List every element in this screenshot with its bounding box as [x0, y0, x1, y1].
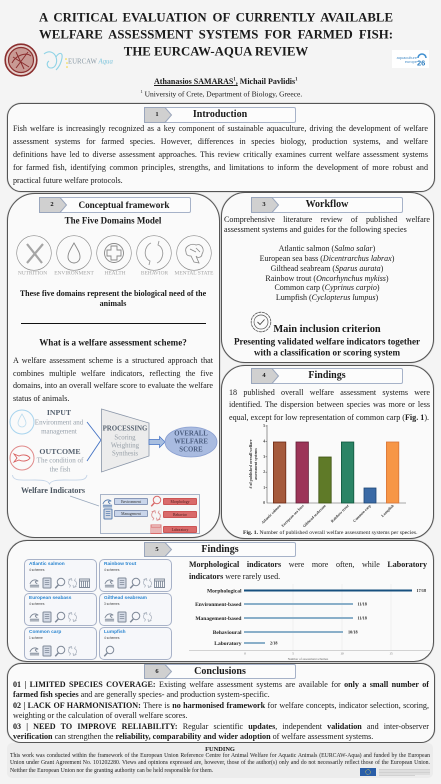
input label: Environment and — [35, 418, 83, 426]
species list: Common carp (Cyprinus carpio) — [274, 283, 380, 292]
introduction text: Fish welfare is increasingly recognized as a key component of sustainable aquaculture, driving the development of welfare — [13, 124, 428, 133]
logo: EURCAW-Aqua: EURCAW Aqua — [68, 59, 113, 66]
y tick labels: 4 — [263, 440, 265, 444]
statement: five domains: animals — [100, 299, 126, 308]
heading: introduction — [144, 107, 296, 123]
connector to indicators box — [70, 496, 99, 506]
diagram: welfare scoring flow — [10, 408, 218, 534]
management pill: Management — [121, 512, 141, 516]
panel: findings indicators — [7, 540, 434, 662]
icon: clipboard — [104, 508, 112, 520]
card: Common carp — [24, 627, 97, 660]
conclusion 02 — [13, 701, 429, 720]
logo: Aquaculture Europe 26 — [392, 50, 429, 68]
funding heading: FUNDING — [205, 746, 235, 753]
introduction text — [13, 124, 428, 185]
species list — [260, 244, 394, 302]
findings text: equal, except for low representation of common carp (Fig. 1). — [229, 413, 429, 422]
axis ticks: Number of assessment schemes — [288, 657, 329, 661]
funding text: Neither the European Union nor the granting authority can be held responsible for them. — [10, 768, 213, 774]
environment pill: Environment — [121, 500, 141, 504]
conclusion 03: 03 | NEED TO IMPROVE RELIABILITY: Regular scientific updates, independent validation and inter-observer — [13, 722, 429, 731]
introduction text: definitions have led to diverse assessment approaches. This review critically examines current welfare assessment systems — [13, 150, 428, 159]
overall score label — [174, 430, 208, 454]
value labels: 2/18 — [270, 640, 277, 646]
y axis title — [249, 439, 258, 488]
value labels: 11/18 — [358, 616, 367, 620]
scheme definition text: combines multiple welfare indicators, reflecting the five — [13, 368, 213, 377]
overall score label: SCORE — [179, 447, 203, 454]
heading: findings — [251, 368, 403, 384]
logo: EURCAW-Aqua — [44, 51, 113, 70]
card: Gilthead seabream: 3 schemes — [104, 602, 119, 606]
heading: introduction: Introduction — [193, 109, 247, 120]
category labels — [261, 503, 395, 528]
workflow intro text — [224, 215, 430, 234]
findings text: 18 published overall welfare assessment systems were — [229, 388, 430, 397]
inclusion criterion heading: Main inclusion criterion — [273, 324, 381, 335]
scheme definition text: status of animals. — [13, 393, 69, 402]
axis ticks — [244, 652, 393, 661]
logo: University of Crete seal — [4, 43, 38, 77]
inclusion criterion text — [234, 336, 420, 358]
card: Lumpfish: Lumpfish — [104, 630, 126, 635]
panel: funding — [7, 743, 433, 778]
heading: conclusions — [144, 664, 296, 679]
heading: workflow: Workflow — [306, 199, 348, 210]
panel: conceptual framework — [7, 193, 220, 538]
input label: INPUT — [47, 408, 71, 417]
behavior pill: Behavior — [173, 513, 187, 517]
panel: conclusions — [7, 663, 435, 743]
value labels: 10/18 — [348, 630, 358, 634]
y tick labels: 3 — [263, 455, 265, 459]
conclusion 01: 01 | LIMITED SPECIES COVERAGE: Existing welfare assessment systems are available for only a small number of — [13, 680, 429, 689]
category labels: Behavioural — [213, 630, 242, 636]
value labels: 11/18 — [358, 602, 367, 606]
statement: five domains — [20, 289, 206, 308]
bar chart: indicator use — [189, 584, 430, 661]
subheading: what is a scheme: What is a welfare assessment scheme? — [39, 337, 187, 347]
outcome label: The condition of — [37, 456, 83, 464]
value labels — [270, 588, 426, 646]
logo: Aquaculture Europe 26: aquaculture europe — [397, 55, 417, 64]
y tick labels — [263, 424, 265, 505]
title: A CRITICAL EVALUATION OF CURRENTLY AVAILABLE — [39, 11, 393, 25]
heading: findings: Findings — [201, 544, 239, 555]
block arrow — [149, 436, 165, 448]
y axis — [266, 425, 406, 503]
morphology pill — [163, 498, 197, 505]
funding text: Union under Grant Agreement No. 101202280. Views and opinions expressed are, however, those of the author(s) only and do not necessarily reflect those of the European Union. — [10, 760, 430, 766]
inclusion criterion text: with a classification or scoring system — [254, 347, 400, 357]
card: European seabass: 4 schemes — [29, 602, 44, 606]
domain labels: ENVIRONMENT — [54, 270, 94, 276]
findings text: Morphological indicators were more often, while Laboratory — [189, 560, 427, 569]
laboratory pill: Laboratory — [172, 528, 188, 532]
authors: Athanasios SAMARAS1, Michail Pavlidis1 — [154, 77, 298, 86]
y axis title: # of published overall welfare — [249, 439, 253, 488]
domain labels: NUTRITION — [18, 270, 47, 276]
morphology pill: Morphology — [170, 500, 190, 504]
card: Lumpfish: 4 schemes — [104, 636, 119, 640]
domain labels: HEALTH — [104, 270, 126, 276]
heading: conclusions: 6 — [155, 668, 159, 675]
title — [39, 11, 393, 59]
heading: introduction: 1 — [155, 111, 159, 118]
category labels: Morphological — [207, 588, 242, 594]
findings text — [189, 560, 427, 581]
processing label: Synthesis — [112, 451, 138, 458]
conclusion 03: verification can strengthen the reliability, comparability and wider adoption of welfare assessment systems. — [13, 732, 373, 741]
bars — [273, 442, 399, 503]
outcome label: the fish — [50, 465, 70, 473]
funding text: This work was conducted within the framework of the European Union Reference Centre for Animal Welfare for Aquatic Animals (EURCAW-Aqua) and funded by the European — [10, 753, 430, 759]
conclusion 02: 02 | LACK OF HARMONISATION: There is no harmonised framework for welfare concepts, indicator selection, scoring, — [13, 701, 429, 710]
findings text: identified. The dispersion between species was more or less — [229, 400, 430, 409]
value labels: 17/18 — [416, 588, 426, 593]
panel: workflow — [221, 192, 434, 363]
disclaimer small print — [379, 769, 430, 776]
overall score label: WELFARE — [174, 439, 208, 446]
introduction text: assessment systems for farmed species. However, differences in species biology, production systems, and welfare — [13, 137, 428, 146]
panel: findings species — [221, 365, 434, 539]
category labels: Common carp — [352, 504, 372, 523]
species list: Lumpfish (Cyclopterus lumpus) — [276, 293, 378, 302]
funding text — [10, 752, 430, 774]
outcome label: OUTCOME — [39, 447, 81, 456]
card: Lumpfish — [99, 627, 172, 660]
y tick labels: 5 — [263, 424, 265, 428]
category labels: Environment-based — [195, 602, 242, 608]
processing label — [102, 426, 148, 458]
card: European seabass — [24, 593, 97, 626]
icon: magnifier — [150, 496, 162, 507]
heading: conceptual framework: Conceptual framework — [78, 200, 170, 210]
icon: health — [97, 236, 131, 270]
icon: validated badge — [250, 312, 272, 332]
species list: Atlantic salmon (Salmo salar) — [279, 244, 375, 253]
affiliation: 1 University of Crete, Department of Biology, Greece. — [140, 89, 302, 98]
laboratory pill — [163, 526, 197, 533]
card: Rainbow trout: Rainbow trout — [104, 562, 136, 567]
icon: swirl — [151, 510, 161, 521]
axis ticks: 0 — [244, 652, 246, 656]
grid — [293, 584, 391, 650]
outcome label — [36, 447, 84, 473]
EU co-funded flag — [360, 768, 376, 776]
input label: management — [41, 427, 77, 435]
workflow intro text: assessment systems and guides for the following species — [224, 225, 407, 234]
y axis title: assessment systems — [254, 448, 258, 480]
category labels — [195, 588, 242, 647]
scheme definition text: domains, into an overall welfare score to evaluate the welfare — [13, 381, 213, 390]
introduction text: for farmed fish, identifying common principles, strengths, and limitations to inform the development of more robust and — [13, 163, 428, 172]
heading: findings: 4 — [262, 372, 266, 379]
title: WELFARE ASSESSMENT SYSTEMS FOR FARMED FISH: — [39, 28, 393, 42]
axis ticks: 5 — [292, 652, 294, 656]
card: Gilthead seabream — [99, 593, 172, 626]
category labels: Gilthead seabream — [302, 503, 327, 528]
heading: conceptual framework — [39, 197, 191, 213]
indicators box — [100, 494, 200, 534]
y tick labels: 0 — [263, 501, 265, 505]
subheading: five domains model: The Five Domains Model — [65, 216, 161, 226]
scheme definition text — [13, 356, 213, 402]
species list: Gilthead seabream (Sparus aurata) — [271, 264, 383, 272]
welfare indicators label: Welfare Indicators — [21, 486, 85, 495]
icon: nutrition — [17, 236, 51, 270]
statement: five domains: These five domains represent the biological need of the — [20, 289, 206, 298]
scheme definition text: A welfare assessment scheme is a structured approach that — [13, 356, 213, 365]
behavior pill — [163, 511, 197, 518]
heading: workflow — [251, 197, 403, 213]
icon: behavior — [137, 236, 171, 270]
conclusion 03 — [13, 722, 429, 741]
environment pill — [114, 498, 148, 505]
species list: European sea bass (Dicentrarchus labrax) — [260, 254, 394, 263]
axis ticks: 15 — [389, 652, 393, 656]
conclusion 01: farmed fish species and are generally species- and production system-specific. — [13, 690, 270, 699]
workflow intro text: Comprehensive literature review of published welfare — [224, 215, 430, 224]
introduction text: practical future welfare protocols. — [13, 176, 123, 185]
y tick labels: 1 — [263, 486, 265, 490]
bar chart: schemes per species — [249, 424, 406, 528]
icon: laboratory — [150, 524, 162, 534]
logo: Aquaculture Europe 26: 26 — [417, 58, 425, 67]
figure caption: Fig. 1. Number of published overall welfare assessment systems per species. — [243, 530, 418, 536]
category labels: Rainbow trout — [330, 503, 350, 523]
processing label: PROCESSING — [103, 426, 147, 433]
management pill — [114, 510, 148, 517]
category labels: Atlantic salmon — [261, 503, 282, 525]
icon: water drop input — [10, 410, 34, 434]
category labels: Laboratory — [214, 641, 242, 647]
card: Rainbow trout — [99, 559, 172, 592]
icon: wave — [102, 499, 112, 508]
heading: conceptual framework: 2 — [50, 201, 54, 208]
icon: mental state — [177, 236, 211, 270]
findings text — [229, 388, 430, 422]
category labels: Management-based — [195, 616, 242, 622]
brace: welfare indicators — [12, 475, 87, 484]
overall score label: OVERALL — [174, 430, 208, 437]
heading: findings: Findings — [308, 370, 346, 381]
axis ticks: 10 — [340, 652, 344, 656]
y tick labels: 2 — [263, 470, 265, 474]
card: European seabass: European seabass — [29, 596, 71, 601]
panel: introduction — [7, 103, 435, 192]
inclusion criterion text: Presenting validated welfare indicators together — [234, 336, 420, 346]
domain labels — [18, 270, 214, 276]
card: Common carp: 1 scheme — [29, 636, 43, 640]
conclusion 01 — [13, 680, 430, 699]
overall score ellipse — [165, 427, 217, 457]
card: Atlantic salmon: Atlantic salmon — [29, 562, 65, 567]
heading: findings: 5 — [155, 546, 159, 553]
card: Rainbow trout: 4 schemes — [104, 568, 119, 572]
icon: environment — [57, 236, 91, 270]
card: Gilthead seabream: Gilthead seabream — [104, 596, 147, 601]
domain labels: MENTAL STATE — [175, 270, 213, 276]
heading: conclusions: Conclusions — [194, 666, 246, 677]
card: Atlantic salmon — [24, 559, 97, 592]
category labels: European sea bass — [281, 504, 305, 528]
input label — [35, 408, 84, 435]
processing label: Weighting — [111, 442, 139, 449]
card: Common carp: Common carp — [29, 630, 61, 635]
five domain icons — [16, 235, 212, 271]
species list: Rainbow trout (Oncorhynchus mykiss) — [265, 274, 389, 282]
bars — [244, 590, 412, 592]
icon: fish outcome — [10, 446, 34, 470]
findings text: indicators were rarely used. — [189, 572, 280, 581]
arrows: input and outcome to processing — [87, 422, 101, 461]
card: Atlantic salmon: 4 schemes — [29, 568, 44, 572]
category labels: Lumpfish — [381, 503, 395, 518]
domain labels: BEHAVIOR — [141, 270, 168, 276]
heading: findings — [144, 542, 296, 557]
processing label: Scoring — [114, 434, 136, 441]
conclusion 02: weighting or the calculation of overall welfare scores. — [13, 711, 187, 720]
processing trapezoid — [102, 409, 149, 472]
title: THE EURCAW-AQUA REVIEW — [124, 45, 308, 59]
heading: workflow: 3 — [262, 201, 266, 208]
